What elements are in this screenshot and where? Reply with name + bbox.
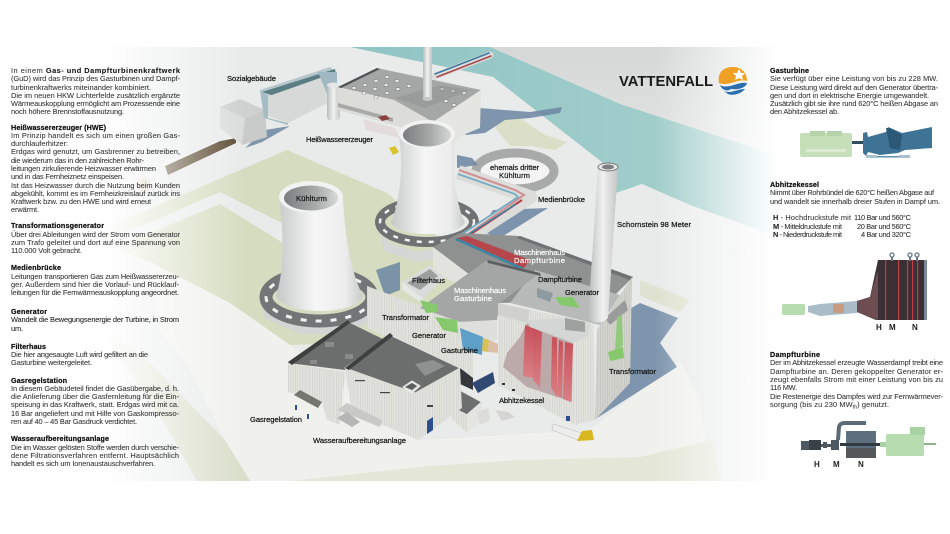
small turbine bbox=[808, 301, 857, 316]
text block: Gasturbine: Diese Leistung wird direkt auf den Generator übertra- bbox=[770, 83, 939, 92]
shadows bbox=[245, 107, 678, 418]
logo wordmark: VATTENFALL bbox=[619, 74, 713, 90]
text block: Medienbrücke: leitungen für die Fernwärmeauskopplung angeordnet. bbox=[11, 288, 179, 297]
shaft bbox=[852, 141, 863, 144]
text block: intro: noch höhere Brennstoffausnutzung. bbox=[11, 107, 124, 116]
text block: Gasregelstation bbox=[11, 376, 180, 426]
label: Dampfturbine: Dampfturbine bbox=[538, 275, 582, 284]
text block: Abhitzekessel: Abhitzekessel bbox=[770, 180, 819, 189]
text block: Gasregelstation: 16 Bar angeliefert und mit Hilfe von Gaskompresso- bbox=[11, 409, 180, 418]
text block: Wasseraufbereitungsanlage: Wasseraufbereitungsanlage bbox=[11, 434, 109, 443]
back tower ring bbox=[380, 202, 474, 262]
label: Maschinenhaus Gasturbine: Maschinenhaus bbox=[454, 286, 506, 295]
lower land bbox=[150, 262, 710, 481]
text block: intro: turbinenkraftwerks miteinander kombiniert. bbox=[11, 83, 151, 92]
box building bbox=[220, 99, 267, 145]
text block: Abhitzekessel: M - Mitteldruckstufe mit bbox=[773, 222, 842, 231]
text block: Heißwassererzeuger: die wiederum das in den zahlreichen Rohr- bbox=[11, 156, 145, 165]
label: Wasseraufbereitungsanlage: Wasseraufbereitungsanlage bbox=[313, 436, 406, 445]
text block: Transformationsgenerator bbox=[11, 221, 181, 255]
cooling tower back bbox=[391, 120, 465, 234]
generator bbox=[800, 131, 852, 157]
text block: Filterhaus: Die hier angesaugte Luft wird gefiltert an die bbox=[11, 350, 148, 359]
label: Generator: Generator bbox=[412, 331, 446, 340]
green diagonal lower left bbox=[97, 323, 250, 481]
text block: Generator: Generator bbox=[11, 307, 47, 316]
gas turbine unit bbox=[460, 328, 501, 355]
river bbox=[350, 47, 800, 245]
text block: Gasturbine bbox=[770, 66, 939, 116]
right fade overlay bbox=[655, 47, 825, 481]
text block: Abhitzekessel: H - Hochdruckstufe mit bbox=[773, 213, 851, 222]
brown bar bbox=[163, 136, 236, 175]
stage labels: M bbox=[833, 460, 840, 469]
label: Transformator: Transformator bbox=[609, 367, 656, 376]
low pressure casing bbox=[840, 431, 882, 458]
text block: Wasseraufbereitungsanlage: Die im Wasser gelösten Stoffe werden durch verschie- bbox=[11, 443, 180, 452]
stage labels: H bbox=[814, 460, 820, 469]
filter house bbox=[402, 265, 445, 304]
text block: Transformationsgenerator: zum Trafo geleitet und dort auf eine Spannung von bbox=[11, 238, 180, 247]
bottom olive band bbox=[290, 440, 720, 481]
diagram: heat recovery boiler bbox=[782, 253, 927, 332]
text block: Wasseraufbereitungsanlage: handelt es sich um Ionenaustauschverfahren. bbox=[11, 459, 155, 468]
text block: intro bbox=[11, 66, 181, 116]
text block: Wasseraufbereitungsanlage: dene Filtrationsverfahren entfernt. Hauptsächlich bbox=[11, 451, 179, 460]
label: ehemals dritter Kühlturm: Kühlturm bbox=[499, 171, 530, 180]
text block: Transformationsgenerator: Über drei Ableitungen wird der Strom vom Generator bbox=[11, 230, 181, 239]
ground bbox=[90, 47, 810, 481]
heat recovery boiler bbox=[498, 303, 595, 425]
text block: Heißwassererzeuger: erwärmt. bbox=[11, 205, 39, 214]
text block: Heißwassererzeuger: Im Prinzip handelt es sich um einen großen Gas- bbox=[11, 131, 181, 140]
text block: Heißwassererzeuger: leitungen zirkulierende Heizwasser erwärmen bbox=[11, 164, 156, 173]
small box bbox=[137, 177, 150, 192]
shaft and HP/MP casings bbox=[801, 440, 839, 450]
text block: intro: Die im neuen HKW Lichterfelde zusätzlich ergänzte bbox=[11, 91, 180, 100]
text block: Abhitzekessel: N - Niederdruckstufe mit bbox=[773, 230, 842, 239]
pipe stub bbox=[363, 115, 400, 138]
green turbine machines bbox=[420, 297, 624, 361]
roof vents bbox=[310, 342, 353, 364]
label: Kühlturm: Kühlturm bbox=[296, 194, 327, 203]
text block: Medienbrücke: Medienbrücke bbox=[11, 263, 61, 272]
green diagonal lower left overlap bbox=[110, 333, 250, 481]
stage labels: M bbox=[889, 323, 896, 332]
diagram: steam turbine and generator bbox=[801, 423, 936, 469]
boiler stages bbox=[885, 260, 918, 320]
land bank bbox=[90, 47, 800, 481]
small generator bbox=[782, 304, 805, 315]
tanks bbox=[337, 403, 382, 427]
right column bbox=[770, 66, 944, 469]
text block: Gasregelstation: ren auf 40 – 45 Bar Gasdruck verdichtet. bbox=[11, 417, 137, 426]
stage labels bbox=[876, 323, 918, 332]
steam pipe bbox=[838, 423, 866, 440]
text block: Heißwassererzeuger: Kraftwerk bzw. zu den HWE und wird erneut bbox=[11, 197, 151, 206]
label: Maschinenhaus Dampfturbine bbox=[514, 248, 565, 265]
text block: Filterhaus: Filterhaus bbox=[11, 342, 46, 351]
yellow vehicle bbox=[389, 146, 399, 155]
text block: Heißwassererzeuger: durchlauferhitzer: bbox=[11, 139, 68, 148]
main chimney bbox=[422, 47, 432, 101]
text block: Heißwassererzeuger: und in das Fernheiznetz einspeisen. bbox=[11, 172, 124, 181]
green field upper bbox=[95, 150, 470, 345]
text block: Gasregelstation: Gasregelstation bbox=[11, 376, 67, 385]
label: Maschinenhaus Gasturbine bbox=[454, 286, 506, 303]
text block: Gasturbine: den Abhitzekessel ab. bbox=[770, 107, 839, 116]
label: Maschinenhaus Dampfturbine: Maschinenhaus bbox=[514, 248, 565, 257]
olive strip right bbox=[640, 280, 690, 312]
label: ehemals dritter Kühlturm: ehemals dritter bbox=[490, 163, 539, 172]
boiler body bbox=[857, 260, 927, 320]
chimney bbox=[588, 163, 618, 322]
text block: Transformationsgenerator: 110.000 Volt gebracht. bbox=[11, 246, 82, 255]
stage labels: N bbox=[912, 323, 918, 332]
steam turbine hall bbox=[433, 233, 633, 420]
red pipes bbox=[455, 236, 530, 269]
green patch near old tower bbox=[495, 118, 567, 150]
text block: Abhitzekessel: und wandelt sie innerhalb dreier Stufen in Dampf um. bbox=[770, 197, 940, 206]
label: ehemals dritter Kühlturm bbox=[490, 163, 539, 180]
text block: Dampfturbine: zeugt ebenfalls Strom mit einer Leistung von bis zu bbox=[770, 375, 943, 384]
text block: intro: In einem Gas- und Dampfturbinenkraftwerk bbox=[11, 66, 181, 75]
annex blocks bbox=[443, 390, 515, 433]
label: Schornstein: Schornstein 98 Meter bbox=[617, 220, 691, 229]
stage labels: N bbox=[858, 460, 864, 469]
diagram: gas turbine and generator bbox=[800, 127, 932, 158]
Sozialgebaeude building bbox=[260, 67, 337, 125]
text block: Dampfturbine: Die Restenergie des Dampfes wird zur Fernwärmever- bbox=[770, 392, 944, 401]
text block: Filterhaus bbox=[11, 342, 148, 367]
roof vents bbox=[352, 76, 466, 106]
label: Gasturbine: Gasturbine bbox=[441, 346, 478, 355]
text block: Dampfturbine bbox=[770, 350, 944, 410]
text block: Filterhaus: Gasturbine weitergeleitet. bbox=[11, 358, 92, 367]
label: Filterhaus: Filterhaus bbox=[412, 276, 445, 285]
gas turbine hall bbox=[367, 260, 541, 385]
label: Medienbrücke: Medienbrücke bbox=[538, 195, 585, 204]
text block: Wasseraufbereitungsanlage bbox=[11, 434, 180, 468]
text block: Dampfturbine: Der im Abhitzekessel erzeugte Wasserdampf treibt eine bbox=[770, 358, 943, 367]
text block: Heißwassererzeuger bbox=[11, 123, 181, 214]
top pipe bridge bbox=[435, 53, 491, 77]
text block: Abhitzekessel bbox=[770, 180, 940, 239]
gap and stairs bbox=[460, 368, 495, 393]
text block: Gasregelstation: speisung in das Kraftwerk, statt. Erdgas wird mit ca. bbox=[11, 400, 179, 409]
gas regulation building bbox=[288, 320, 395, 425]
old tower foundation bbox=[476, 153, 554, 189]
logo: Vattenfall bbox=[619, 67, 747, 95]
text block: Abhitzekessel: 4 Bar und 320°C bbox=[861, 230, 912, 239]
left text column bbox=[11, 66, 181, 468]
icon: sun and waves bbox=[719, 67, 747, 95]
text block: intro: (GuD) wird das Prinzip des Gasturbinen und Dampf- bbox=[11, 74, 181, 83]
text block: Heißwassererzeuger: Erdgas wird genutzt, um Gasbrenner zu betreiben, bbox=[11, 147, 180, 156]
label: Maschinenhaus Gasturbine: Gasturbine bbox=[454, 294, 492, 303]
left fade overlay bbox=[0, 47, 245, 481]
text block: Medienbrücke: Leitungen transportieren Gas zum Heißwassererzeu- bbox=[11, 272, 180, 281]
text block: Heißwassererzeuger: Ist das Heizwasser durch die Nutzung beim Kunden bbox=[11, 181, 180, 190]
text block: Generator: um. bbox=[11, 324, 23, 333]
stage labels: H bbox=[876, 323, 882, 332]
generator bbox=[880, 427, 936, 456]
turbine bbox=[863, 127, 932, 158]
text block: Medienbrücke bbox=[11, 263, 180, 297]
text block: Medienbrücke: ger. Außerdem sind hier die Vorlauf- und Rücklauf- bbox=[11, 280, 180, 289]
cooling tower front bbox=[276, 181, 363, 311]
text block: Dampfturbine: sorgung (bis zu 230 MW bbox=[770, 400, 853, 409]
front tower ring bbox=[262, 273, 380, 334]
text block: Gasturbine: Gasturbine bbox=[770, 66, 809, 75]
text block: Abhitzekessel: 20 Bar und 560°C bbox=[857, 222, 912, 231]
text block: Abhitzekessel: Nimmt über Rohrbündel die 620°C heißen Abgase auf bbox=[770, 188, 935, 197]
text block: Generator bbox=[11, 307, 179, 333]
text block: Dampfturbine: Dampfturbine an. Deren gekoppelter Generator er- bbox=[770, 367, 944, 376]
label: Sozialgebäude: Sozialgebäude bbox=[227, 74, 276, 83]
text block: Abhitzekessel: 110 Bar und 560°C bbox=[854, 213, 912, 222]
text block: Gasturbine: Sie verfügt über eine Leistung von bis zu 228 MW. bbox=[770, 74, 938, 83]
plant labels bbox=[227, 74, 691, 445]
road strip bbox=[95, 192, 300, 256]
panel: aerial plant illustration bbox=[90, 47, 810, 481]
text block: Generator: Wandelt die Bewegungsenergie der Turbine, in Strom bbox=[11, 315, 179, 324]
label: Gasregelstation: Gasregelstation bbox=[250, 415, 302, 424]
text block: Gasregelstation: In diesem Gebäudeteil findet die Gasübergabe, d. h. bbox=[11, 384, 179, 393]
text block: Heißwassererzeuger: abgekühlt, kommt es im Fernheizkreislauf zurück ins bbox=[11, 189, 180, 198]
label: Maschinenhaus Dampfturbine: Dampfturbine bbox=[514, 256, 565, 265]
text block: Heißwassererzeuger: Heißwassererzeuger (HWE) bbox=[11, 123, 107, 132]
text block: Dampfturbine: Dampfturbine bbox=[770, 350, 820, 359]
label: Generator: Generator bbox=[565, 288, 599, 297]
water treatment building bbox=[345, 333, 462, 440]
silo bbox=[327, 82, 340, 120]
steam outlets bbox=[890, 253, 919, 257]
text block: Dampfturbine: 116 MW. bbox=[770, 383, 797, 392]
text block: intro: Wärmeauskopplung ermöglicht am Prozessende eine bbox=[11, 99, 180, 108]
stage labels bbox=[814, 460, 864, 469]
text block: Gasturbine: Zusätzlich gibt sie ihre rund 620°C heißen Abgase an bbox=[770, 99, 938, 108]
label: Transformator: Transformator bbox=[382, 313, 429, 322]
text block: Transformationsgenerator: Transformationsgenerator bbox=[11, 221, 104, 230]
label: Heißwassererzeuger: Heißwassererzeuger bbox=[306, 135, 373, 144]
media bridge bbox=[456, 170, 530, 241]
text block: Dampfturbine: th bbox=[853, 404, 857, 410]
label: Abhitzekessel: Abhitzekessel bbox=[499, 396, 544, 405]
text block: Gasturbine: gen und dort in elektrische Energie umgewandelt. bbox=[770, 91, 929, 100]
tanker truck bbox=[552, 424, 594, 441]
steam turbine bbox=[537, 288, 553, 302]
text block: Gasregelstation: die Anlieferung über die Gasfernleitung für die Ein- bbox=[11, 392, 180, 401]
Heisswassererzeuger building bbox=[338, 68, 481, 150]
text block: Dampfturbine: ) genutzt. bbox=[857, 400, 889, 409]
